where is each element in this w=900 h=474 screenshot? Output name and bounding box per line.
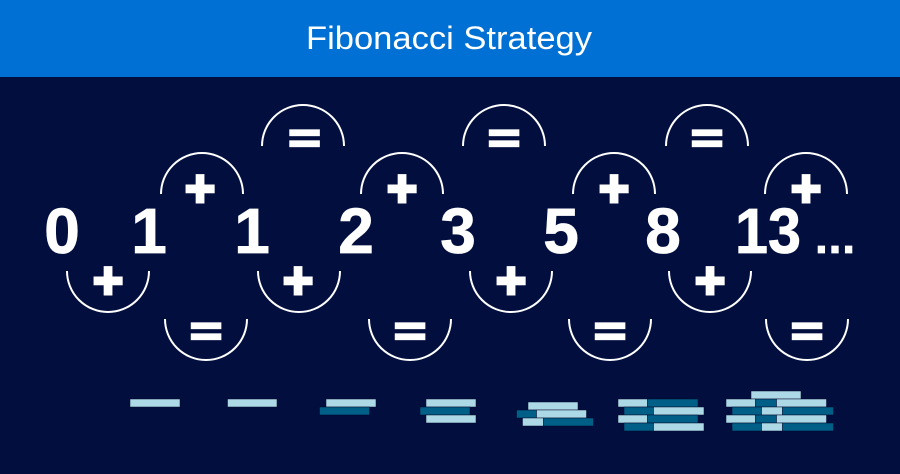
bottom plus arcs: + xyxy=(283,252,313,310)
top plus arcs: + xyxy=(185,160,215,218)
top equals arcs: = xyxy=(488,116,520,161)
bottom equals arcs: = xyxy=(190,309,222,354)
bottom plus arcs xyxy=(67,252,751,312)
top equals arcs: = xyxy=(691,116,723,161)
number sequence xyxy=(44,195,855,267)
bottom plus arcs: + xyxy=(93,252,123,310)
top equals arcs: = xyxy=(289,116,320,161)
bottom equals arcs xyxy=(165,309,848,360)
number sequence: 0 xyxy=(44,195,80,267)
brick stack 1 xyxy=(130,399,180,407)
number sequence: ... xyxy=(815,211,855,263)
bottom equals arcs: = xyxy=(394,309,426,354)
bottom equals arcs: = xyxy=(791,309,823,354)
bottom plus arcs: + xyxy=(695,252,725,310)
number sequence: 2 xyxy=(338,195,374,267)
top plus arcs: + xyxy=(599,160,629,218)
number sequence: 13 xyxy=(735,195,801,267)
brick stack 2 xyxy=(228,399,277,407)
bottom equals arcs: = xyxy=(594,309,626,354)
brick stack 7 xyxy=(726,391,834,431)
brick stack 3 xyxy=(320,399,376,415)
number sequence: 5 xyxy=(543,195,579,267)
top plus arcs: + xyxy=(387,160,417,218)
number sequence: 8 xyxy=(645,195,681,267)
brick stack 6 xyxy=(618,399,704,431)
number sequence: 1 xyxy=(131,195,167,267)
bottom plus arcs: + xyxy=(496,252,526,310)
top plus arcs xyxy=(161,153,847,218)
number sequence: 1 xyxy=(234,195,270,267)
top plus arcs: + xyxy=(791,160,821,218)
title banner xyxy=(0,0,900,77)
number sequence: 3 xyxy=(440,195,476,267)
brick stack 5 xyxy=(516,402,594,426)
top equals arcs xyxy=(262,105,748,161)
title banner: Fibonacci Strategy xyxy=(306,20,592,56)
brick stack 4 xyxy=(420,399,476,423)
